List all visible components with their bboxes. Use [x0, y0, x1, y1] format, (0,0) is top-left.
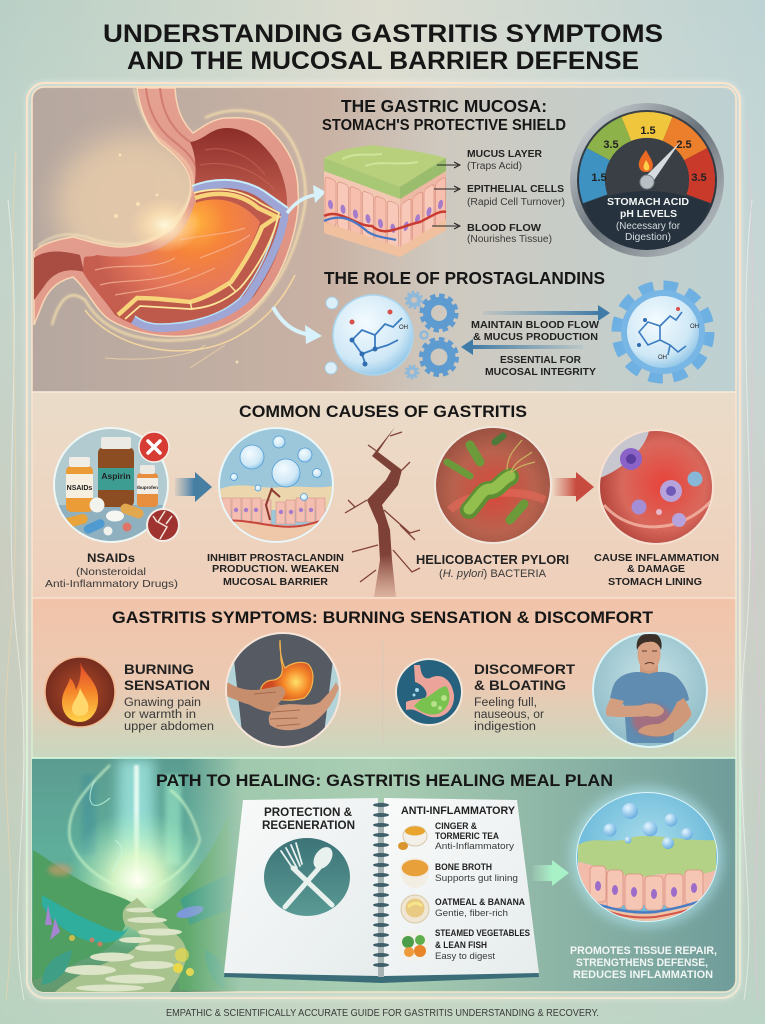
right page: BONE BROTH — [435, 862, 492, 872]
text: tissue repair benefits: STRENGTHENS DEFENSE, — [576, 957, 708, 969]
text: tissue repair benefits — [570, 945, 717, 981]
icon: H. pylori bacteria circle — [432, 424, 556, 548]
icon: inflammation circle — [596, 425, 716, 547]
right page: Anti-Inflammatory — [435, 841, 514, 852]
text: tissue repair benefits: REDUCES INFLAMMATION — [573, 969, 713, 981]
right page: CINGER & — [435, 821, 477, 831]
text: burning sensation: or warmth in — [124, 709, 196, 721]
gauge: stomach acid pH levels: 3.5 — [691, 172, 707, 184]
icon: prostaglandin molecule bubble — [325, 295, 413, 375]
text: burning sensation — [124, 661, 214, 733]
spiral binding — [373, 802, 389, 977]
arrow: NSAIDs to barrier damage — [175, 472, 212, 502]
callout labels: mucosa layers: (Traps Acid) — [467, 161, 522, 172]
text: prostaglandin function: MAINTAIN BLOOD FLOW — [471, 319, 599, 331]
text: inhibit prostaglandin: MUCOSAL BARRIER — [223, 576, 328, 588]
arrow: stomach to prostaglandin molecule — [273, 307, 322, 344]
title — [103, 20, 663, 75]
text: NSAIDs label: NSAIDs — [87, 551, 135, 565]
callout labels: mucosa layers: (Nourishes Tissue) — [467, 234, 552, 245]
icon: NSAID pills circle — [50, 425, 180, 549]
callout labels: mucosa layers: MUCUS LAYER — [467, 148, 542, 160]
text: discomfort and bloating: nauseous, or — [474, 709, 544, 721]
title: UNDERSTANDING GASTRITIS SYMPTOMS — [103, 20, 663, 48]
illustration: stomach cross-section — [34, 88, 305, 368]
text: NSAIDs label: (Nonsteroidal — [76, 566, 146, 578]
diagram: mucosa tissue block — [324, 145, 446, 257]
right page: OATMEAL & BANANA — [435, 897, 525, 907]
text: prostaglandin function — [471, 319, 599, 378]
gauge: stomach acid pH levels: Digestion) — [625, 232, 671, 243]
right page: Gentie, fiber-rich — [435, 908, 508, 919]
icon: gears — [406, 292, 457, 378]
icon: flame circle — [45, 657, 115, 727]
gauge: stomach acid pH levels: 2.5 — [676, 139, 692, 151]
icon: NSAID pills circle: Aspirin — [101, 471, 131, 481]
icon: large gear with molecule — [617, 286, 709, 378]
illustration: stomach lining crack — [345, 427, 420, 597]
right page: TORMERIC TEA — [435, 831, 499, 841]
left page: PROTECTION & — [264, 805, 352, 819]
icon: large gear with molecule: OH — [690, 324, 699, 330]
text: prostaglandin function: ESSENTIAL FOR — [500, 354, 581, 366]
gauge: stomach acid pH levels: pH LEVELS — [620, 208, 677, 220]
gauge: stomach acid pH levels: STOMACH ACID — [607, 196, 689, 208]
text: Helicobacter pylori — [416, 553, 569, 580]
text: cause inflammation: & DAMAGE — [627, 563, 685, 575]
gauge: stomach acid pH levels: 1.5 — [640, 125, 656, 137]
text: burning sensation: upper abdomen — [124, 721, 214, 733]
heading: gastric mucosa — [322, 96, 566, 134]
right page: & LEAN FISH — [435, 940, 487, 950]
left page — [224, 798, 378, 976]
heading: role of prostaglandins: THE ROLE OF PROSTAGLANDINS — [324, 268, 605, 288]
heading: gastric mucosa: STOMACH'S PROTECTIVE SHIELD — [322, 117, 566, 134]
text: burning sensation: SENSATION — [124, 677, 210, 693]
right page — [384, 798, 539, 976]
text: discomfort and bloating: & BLOATING — [474, 677, 566, 693]
arrow: stomach to mucosa block — [287, 185, 326, 213]
illustration: forest healing path — [30, 759, 250, 994]
footer: EMPATHIC & SCIENTIFICALLY ACCURATE GUIDE FOR GASTRITIS UNDERSTANDING & RECOVERY. — [166, 1008, 599, 1019]
arrow: maintain (right) — [483, 305, 610, 321]
text: NSAIDs label — [45, 551, 178, 590]
right page: ANTI-INFLAMMATORY — [401, 805, 516, 817]
text: discomfort and bloating — [474, 661, 575, 733]
text: burning sensation: BURNING — [124, 661, 194, 677]
text: inhibit prostaglandin: PRODUCTION. WEAKEN — [212, 563, 339, 575]
callout labels: mucosa layers: (Rapid Cell Turnover) — [467, 197, 565, 208]
text: Helicobacter pylori: HELICOBACTER PYLORI — [416, 553, 569, 567]
callout labels: mucosa layers: EPITHELIAL CELLS — [467, 183, 564, 195]
text: prostaglandin function: MUCOSAL INTEGRITY — [485, 366, 596, 378]
text: cause inflammation — [594, 552, 719, 588]
illustration: man with stomach discomfort — [592, 632, 708, 748]
text: inhibit prostaglandin: INHIBIT PROSTACLANDIN — [207, 552, 344, 564]
icon: NSAID pills circle: NSAIDs — [67, 485, 92, 492]
heading: path to healing: PATH TO HEALING: GASTRITIS HEALING MEAL PLAN — [156, 771, 613, 790]
text: inhibit prostaglandin — [207, 552, 344, 588]
text: Helicobacter pylori: (H. pylori) BACTERIA — [439, 568, 547, 580]
icon: NSAID pills circle: Ibuprofen — [137, 485, 158, 490]
icon: bloated stomach circle — [395, 658, 463, 726]
gauge: stomach acid pH levels: 1.5 — [591, 172, 607, 184]
heading: symptoms: GASTRITIS SYMPTOMS: BURNING SENSATION & DISCOMFORT — [112, 608, 654, 627]
icon: weakened barrier circle — [218, 427, 334, 543]
gauge: stomach acid pH levels: 3.5 — [603, 139, 619, 151]
gauge: stomach acid pH levels: (Necessary for — [616, 221, 681, 232]
text: cause inflammation: STOMACH LINING — [608, 576, 702, 588]
heading: common causes: COMMON CAUSES OF GASTRITIS — [239, 402, 527, 421]
arrow: pylori to inflammation — [554, 472, 594, 502]
illustration: healed tissue bubble — [571, 787, 723, 927]
icon: prostaglandin molecule bubble: OH — [399, 325, 408, 331]
title: AND THE MUCOSAL BARRIER DEFENSE — [127, 47, 639, 75]
left page: REGENERATION — [262, 818, 355, 832]
icon: large gear with molecule: OH — [658, 355, 667, 361]
right page: Supports gut lining — [435, 873, 518, 884]
text: burning sensation: Gnawing pain — [124, 697, 201, 709]
text: discomfort and bloating: Feeling full, — [474, 697, 537, 709]
right page: Easy to digest — [435, 951, 495, 962]
text: prostaglandin function: & MUCUS PRODUCTION — [473, 331, 598, 343]
arrow: essential (left) — [461, 339, 583, 355]
illustration: torso with burning stomach — [225, 632, 341, 750]
callout labels: mucosa layers — [432, 148, 565, 245]
text: discomfort and bloating: indigestion — [474, 721, 536, 733]
right page: STEAMED VEGETABLES — [435, 928, 530, 938]
text: NSAIDs label: Anti-Inflammatory Drugs) — [45, 578, 178, 590]
heading: gastric mucosa: THE GASTRIC MUCOSA: — [341, 96, 547, 116]
gauge: stomach acid pH levels — [570, 103, 724, 257]
text: discomfort and bloating: DISCOMFORT — [474, 661, 575, 677]
callout labels: mucosa layers: BLOOD FLOW — [467, 222, 541, 234]
text: tissue repair benefits: PROMOTES TISSUE REPAIR, — [570, 945, 717, 957]
arrow: book to healed tissue — [532, 860, 569, 886]
book: meal plan — [224, 798, 539, 983]
text: cause inflammation: CAUSE INFLAMMATION — [594, 552, 719, 564]
